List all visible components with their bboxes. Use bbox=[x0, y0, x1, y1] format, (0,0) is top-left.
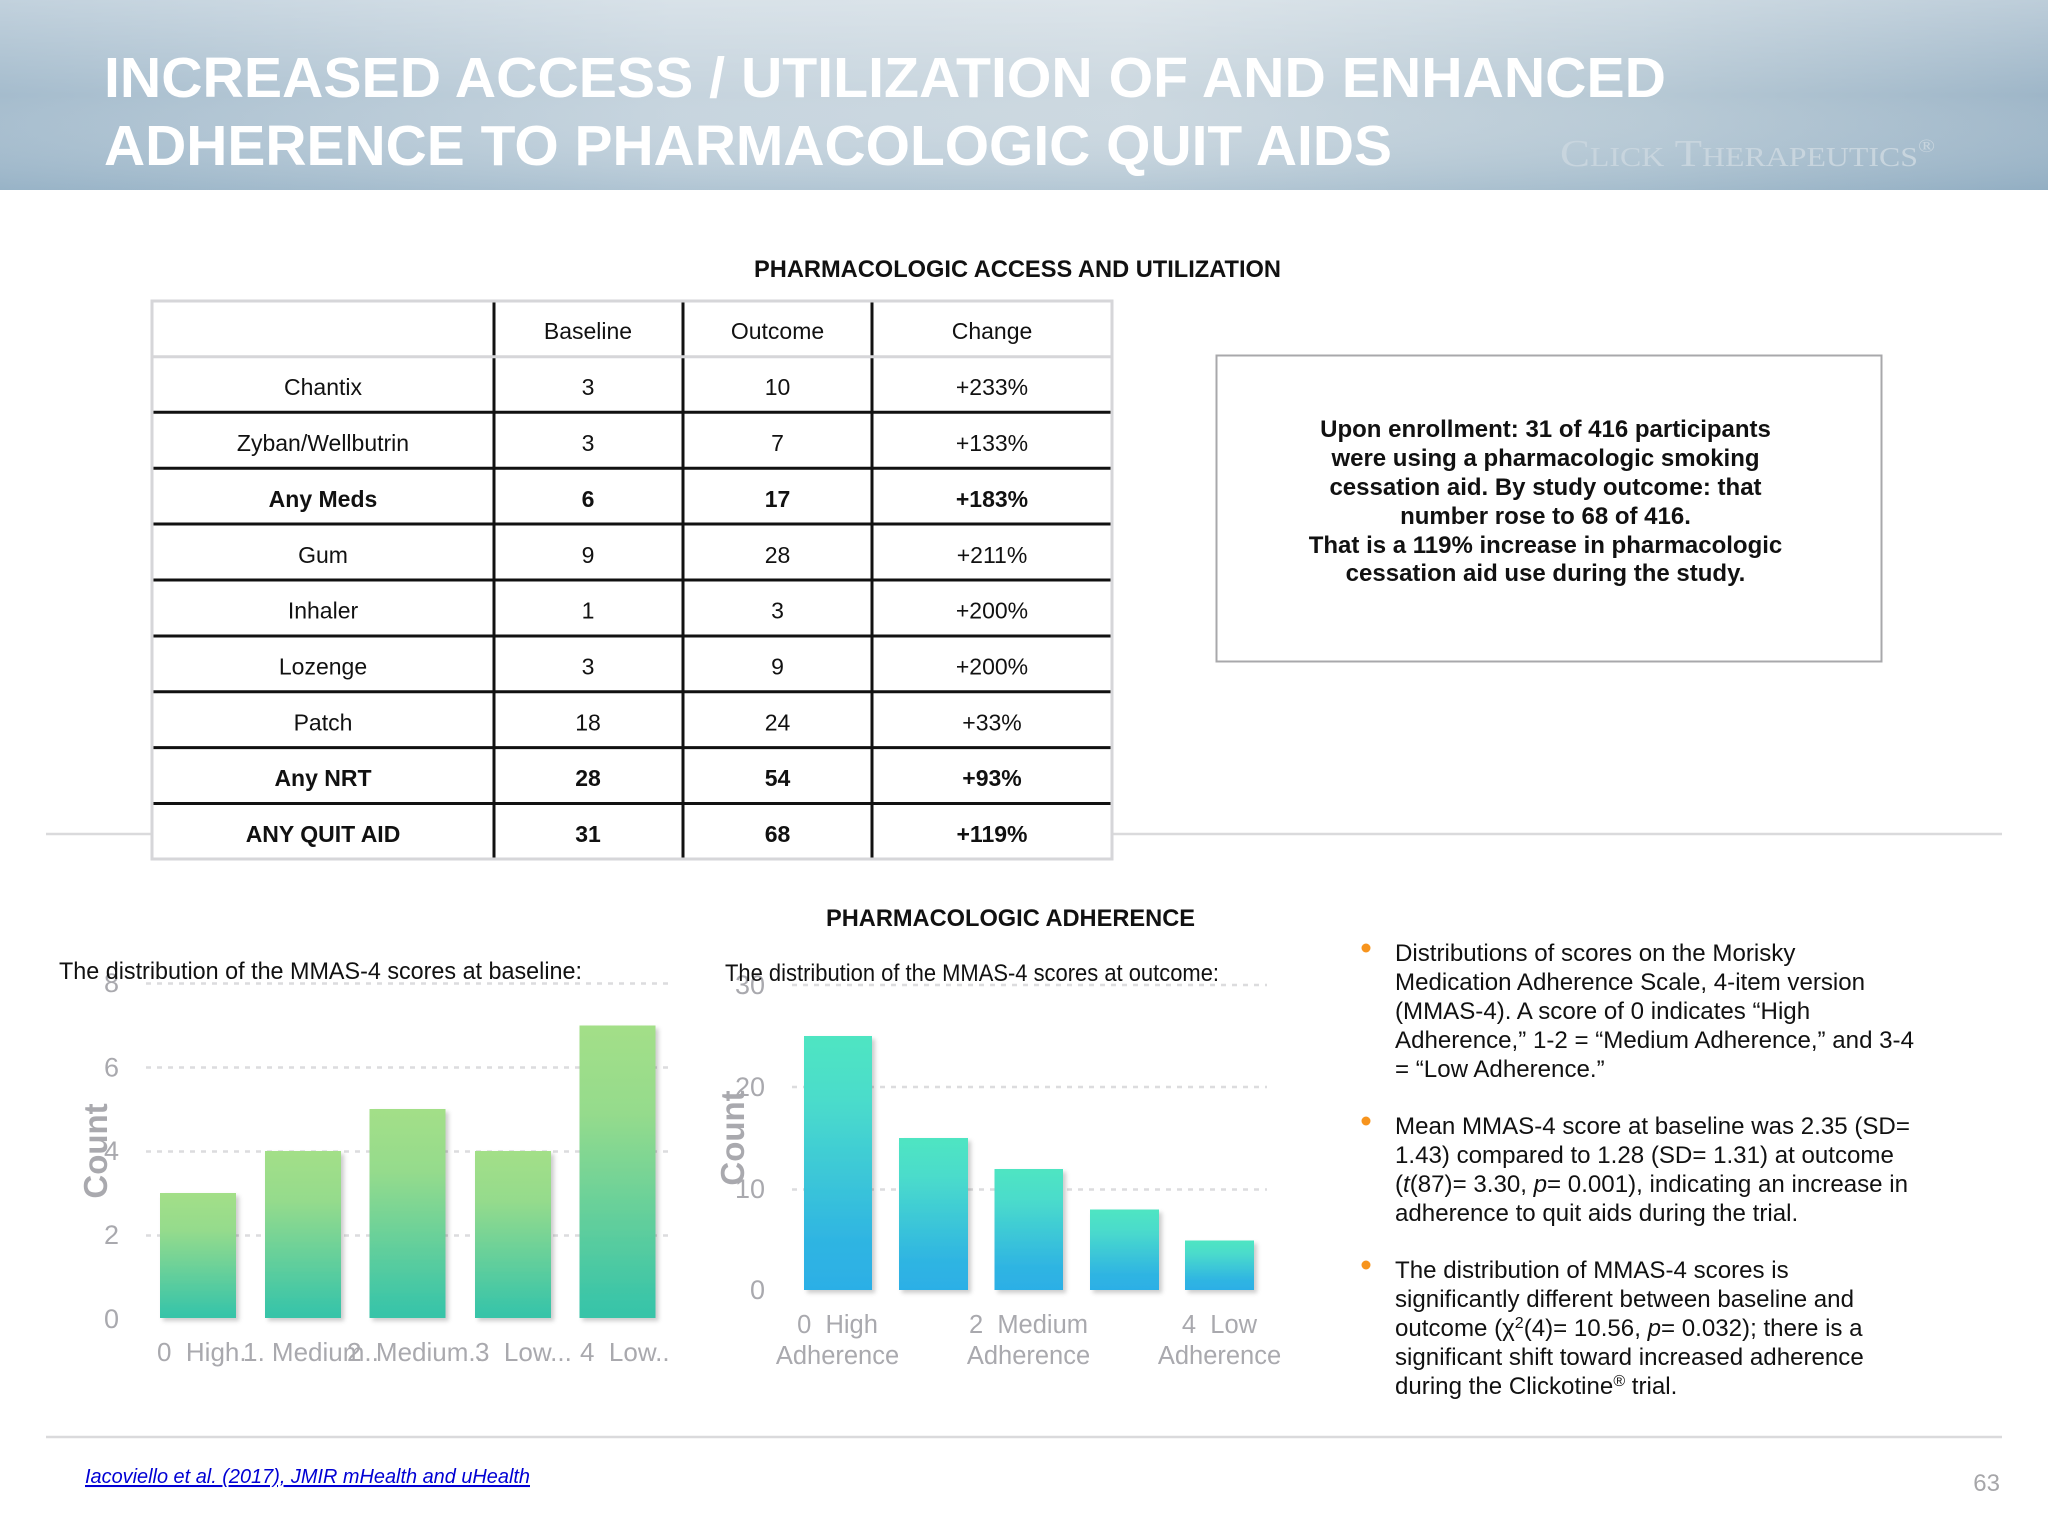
divider line bottom bbox=[46, 1436, 2002, 1438]
bars outcome bbox=[804, 1036, 1254, 1290]
x axis labels baseline: 3 Low... bbox=[475, 1337, 572, 1367]
row: Gum: 9 bbox=[582, 542, 594, 568]
row: Gum: 28 bbox=[765, 542, 790, 568]
title: ADHERENCE TO PHARMACOLOGIC QUIT AIDS bbox=[104, 114, 1392, 178]
row: Inhaler: +200% bbox=[956, 598, 1028, 624]
table header row: Outcome bbox=[731, 318, 824, 344]
row: Gum bbox=[298, 542, 1027, 568]
row: Any Meds: 17 bbox=[765, 486, 790, 512]
bullet 3: outcome (χ bbox=[1395, 1315, 1515, 1342]
row: Inhaler bbox=[288, 598, 1028, 624]
row: Zyban/Wellbutrin: 3 bbox=[582, 430, 594, 456]
y axis ticks baseline: 6 bbox=[104, 1052, 119, 1082]
row: Zyban/Wellbutrin: 7 bbox=[771, 430, 784, 456]
y axis title outcome: Count bbox=[714, 1090, 751, 1186]
row: Any Quit Aid: +119% bbox=[956, 821, 1028, 847]
chart title: baseline: The distribution of the MMAS-4 scores at baseline: bbox=[59, 958, 582, 985]
row: Patch: 18 bbox=[575, 710, 601, 736]
bullet 2: (t(87)= 3.30, p= 0.001), indicating an increase in bbox=[1395, 1171, 1908, 1198]
row: Lozenge: 3 bbox=[582, 654, 594, 680]
x axis labels outcome: Adherence bbox=[776, 1342, 899, 1370]
heading: pharmacologic access and utilization: PHARMACOLOGIC ACCESS AND UTILIZATION bbox=[754, 256, 1281, 283]
bullet 3: during the Clickotine bbox=[1395, 1373, 1613, 1400]
row: Inhaler: 1 bbox=[582, 598, 594, 624]
callout: enrollment summary: number rose to 68 of 416. bbox=[1400, 503, 1691, 530]
row: Gum: +211% bbox=[957, 542, 1027, 568]
x axis labels outcome bbox=[776, 1311, 1281, 1370]
row: Any Quit Aid bbox=[246, 821, 1028, 847]
bullet 3: trial. bbox=[1625, 1373, 1677, 1400]
callout: enrollment summary: cessation aid use during the study. bbox=[1346, 560, 1745, 587]
logo watermark: Click Therapeutics bbox=[1560, 133, 1863, 175]
bullet 3: ® bbox=[1613, 1373, 1625, 1390]
x axis labels baseline: 4 Low.. bbox=[580, 1337, 670, 1367]
bars baseline bbox=[160, 1026, 656, 1318]
heading: pharmacologic adherence: PHARMACOLOGIC ADHERENCE bbox=[826, 905, 1195, 932]
row: Any Quit Aid: ANY QUIT AID bbox=[246, 821, 400, 847]
row: Inhaler: Inhaler bbox=[288, 598, 359, 624]
bullet 2: adherence to quit aids during the trial. bbox=[1395, 1200, 1798, 1227]
chart title: outcome: The distribution of the MMAS-4 scores at outcome: bbox=[725, 960, 1219, 987]
row: Any Meds: 6 bbox=[582, 486, 594, 512]
row: Chantix bbox=[284, 374, 1028, 400]
bullet 1: = “Low Adherence.” bbox=[1395, 1056, 1605, 1083]
x axis labels outcome: 0 High bbox=[797, 1311, 878, 1339]
callout: enrollment summary: That is a 119% increase in pharmacologic bbox=[1309, 532, 1782, 559]
row: Zyban/Wellbutrin bbox=[237, 430, 1028, 456]
row: Chantix: +233% bbox=[956, 374, 1028, 400]
callout: enrollment summary bbox=[1216, 356, 1882, 662]
y axis ticks outcome: 30 bbox=[735, 970, 765, 1000]
y axis ticks baseline: 0 bbox=[104, 1304, 119, 1334]
bullet 2 bbox=[1362, 1113, 1910, 1227]
row: Any Meds: Any Meds bbox=[269, 486, 377, 512]
row: Patch bbox=[294, 710, 1022, 736]
row: Chantix: 3 bbox=[582, 374, 594, 400]
row: Chantix: 10 bbox=[765, 374, 790, 400]
bullet 2: 1.43) compared to 1.28 (SD= 1.31) at outcome bbox=[1395, 1142, 1894, 1169]
row: Lozenge: Lozenge bbox=[279, 654, 367, 680]
bullet 3: (4)= 10.56, bbox=[1524, 1315, 1648, 1342]
bullet 1: Medication Adherence Scale, 4-item version bbox=[1395, 969, 1865, 996]
row: Lozenge bbox=[279, 654, 1028, 680]
x axis labels outcome: 2 Medium bbox=[969, 1311, 1088, 1339]
bullet 3 bbox=[1362, 1257, 1864, 1400]
bullet 3: p= 0.032); there is a bbox=[1648, 1315, 1863, 1342]
bar chart: baseline bbox=[77, 968, 670, 1367]
table header row: Change bbox=[952, 318, 1032, 344]
bullet 1 bbox=[1362, 940, 1914, 1083]
y axis ticks baseline: 4 bbox=[104, 1136, 119, 1166]
x axis labels outcome: Adherence bbox=[1158, 1342, 1281, 1370]
bullet 3: The distribution of MMAS-4 scores is bbox=[1395, 1257, 1789, 1284]
row: Any NRT: 28 bbox=[575, 765, 601, 791]
row: Patch: Patch bbox=[294, 710, 352, 736]
bullet 2: Mean MMAS-4 score at baseline was 2.35 (SD= bbox=[1395, 1113, 1910, 1140]
row: Any Meds bbox=[269, 486, 1028, 512]
logo watermark: ® bbox=[1918, 136, 1935, 157]
table header row: Baseline bbox=[544, 318, 632, 344]
bullet 3: significantly different between baseline and bbox=[1395, 1286, 1854, 1313]
table: quit aid use bbox=[152, 301, 1112, 859]
page number: 63 bbox=[1973, 1470, 2000, 1497]
bullet list: findings bbox=[1362, 940, 1914, 1400]
callout: enrollment summary: cessation aid. By study outcome: that bbox=[1329, 474, 1762, 501]
row: Zyban/Wellbutrin: +133% bbox=[956, 430, 1028, 456]
y axis ticks baseline bbox=[104, 968, 119, 1334]
bullet 3: 2 bbox=[1515, 1315, 1524, 1332]
row: Patch: 24 bbox=[765, 710, 790, 736]
bullet 1: Distributions of scores on the Morisky bbox=[1395, 940, 1795, 967]
title bbox=[104, 46, 1666, 178]
x axis labels baseline: 0 High. . bbox=[157, 1337, 265, 1367]
row: Inhaler: 3 bbox=[771, 598, 784, 624]
callout: enrollment summary: Upon enrollment: 31 of 416 participants bbox=[1320, 416, 1771, 443]
row: Any Quit Aid: 68 bbox=[765, 821, 790, 847]
divider line middle bbox=[46, 833, 2002, 835]
row: Chantix: Chantix bbox=[284, 374, 362, 400]
row: Any NRT: +93% bbox=[962, 765, 1022, 791]
x axis labels baseline: 1 Medium.. bbox=[243, 1337, 379, 1367]
row: Any Meds: +183% bbox=[956, 486, 1028, 512]
y axis title baseline: Count bbox=[77, 1103, 114, 1199]
row: Lozenge: 9 bbox=[771, 654, 784, 680]
row: Any NRT: Any NRT bbox=[274, 765, 372, 791]
bullet 3: significant shift toward increased adherence bbox=[1395, 1344, 1864, 1371]
y axis ticks outcome: 0 bbox=[750, 1275, 765, 1305]
citation link: Iacoviello et al. (2017), JMIR mHealth and uHealth bbox=[85, 1465, 530, 1488]
x axis labels outcome: 4 Low bbox=[1182, 1311, 1258, 1339]
row: Any NRT bbox=[274, 765, 1022, 791]
bullet 1: Adherence,” 1-2 = “Medium Adherence,” and 3-4 bbox=[1395, 1027, 1914, 1054]
y axis ticks outcome: 20 bbox=[735, 1072, 765, 1102]
table header row bbox=[544, 318, 1032, 344]
x axis labels baseline bbox=[157, 1337, 670, 1367]
row: Any NRT: 54 bbox=[765, 765, 790, 791]
row: Zyban/Wellbutrin: Zyban/Wellbutrin bbox=[237, 430, 409, 456]
y axis ticks outcome bbox=[735, 970, 765, 1305]
bullet 1: (MMAS-4). A score of 0 indicates “High bbox=[1395, 998, 1810, 1025]
bar chart: outcome bbox=[714, 970, 1281, 1370]
row: Gum: Gum bbox=[298, 542, 348, 568]
x axis labels outcome: Adherence bbox=[967, 1342, 1090, 1370]
row: Lozenge: +200% bbox=[956, 654, 1028, 680]
row: Patch: +33% bbox=[962, 710, 1022, 736]
x axis labels baseline: 2 Medium.. bbox=[347, 1337, 483, 1367]
y axis ticks baseline: 8 bbox=[104, 968, 119, 998]
title: INCREASED ACCESS / UTILIZATION OF AND ENHANCED bbox=[104, 46, 1666, 110]
callout: enrollment summary: were using a pharmacologic smoking bbox=[1330, 445, 1760, 472]
row: Any Quit Aid: 31 bbox=[575, 821, 601, 847]
header banner bbox=[0, 0, 2048, 190]
y axis ticks baseline: 2 bbox=[104, 1220, 119, 1250]
y axis ticks outcome: 10 bbox=[735, 1174, 765, 1204]
